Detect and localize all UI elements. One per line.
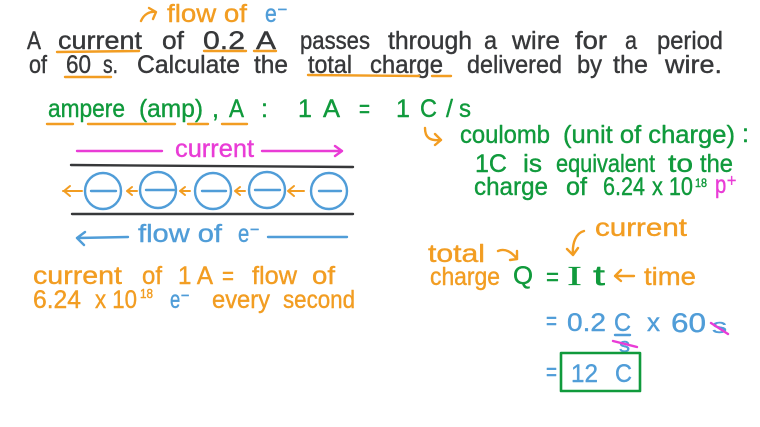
question text: delivered xyxy=(467,51,562,79)
question text: Calculate xyxy=(137,51,240,79)
calculation step: = xyxy=(546,307,557,335)
ampere definition: A xyxy=(229,95,244,123)
result box: 12 xyxy=(571,360,598,388)
question text: total xyxy=(308,51,352,79)
current label with arrow: current xyxy=(175,135,254,163)
coulomb definition: p⁺ xyxy=(715,171,737,199)
question text: the xyxy=(613,51,648,79)
coulomb definition: equivalent xyxy=(556,150,655,178)
formula: Q = I t: I xyxy=(567,261,582,291)
question text: wire. xyxy=(664,51,722,79)
statement: 1 A flow of electrons: x 10 xyxy=(95,286,137,314)
coulomb definition: 6.24 xyxy=(603,173,645,201)
coulomb definition: (unit of charge) xyxy=(563,121,735,149)
ampere definition: 1 xyxy=(396,95,410,123)
question text: s. xyxy=(103,51,118,79)
formula annotations: time xyxy=(644,263,696,291)
ampere definition: / xyxy=(446,95,453,123)
annotation: flow of electrons xyxy=(141,0,288,28)
formula annotations: charge xyxy=(430,263,500,291)
ampere underlines xyxy=(47,123,247,125)
flow of electrons label with arrow xyxy=(77,220,347,248)
statement: 1 A flow of electrons: flow xyxy=(252,262,298,290)
formula annotations xyxy=(428,214,696,291)
question text: A xyxy=(256,27,276,55)
statement: 1 A flow of electrons: 1 A xyxy=(178,262,213,290)
statement: 1 A flow of electrons: e⁻ xyxy=(170,286,190,314)
ampere definition: A xyxy=(323,95,340,123)
question text: of xyxy=(162,27,184,55)
question text: 60 xyxy=(66,51,91,79)
result box: C xyxy=(615,360,632,388)
formula: Q = I t: t xyxy=(593,260,605,291)
coulomb definition: the xyxy=(700,150,733,178)
coulomb definition: charge xyxy=(474,173,548,201)
coulomb definition: of xyxy=(566,173,587,201)
statement: 1 A flow of electrons: 18 xyxy=(140,286,153,301)
coulomb definition: to xyxy=(668,150,693,178)
formula: Q = I t: Q xyxy=(513,262,533,290)
calculation step: s xyxy=(712,316,727,338)
question text: by xyxy=(577,51,602,79)
question text: A xyxy=(27,27,41,55)
ampere definition xyxy=(48,95,471,123)
ampere definition: : xyxy=(261,95,268,123)
question text: a xyxy=(625,27,637,55)
question text: period xyxy=(657,27,723,55)
formula: Q = I t: = xyxy=(546,263,559,291)
icon: hook arrow to coulomb xyxy=(425,128,441,145)
statement: 1 A flow of electrons: of xyxy=(312,262,335,290)
coulomb definition: is xyxy=(523,150,542,178)
coulomb definition: : xyxy=(742,120,749,148)
formula annotations: current xyxy=(595,214,687,242)
question text: for xyxy=(575,27,607,55)
calculation step: 0.2 xyxy=(567,309,606,337)
ampere definition: , xyxy=(212,95,219,123)
statement: 1 A flow of electrons: every xyxy=(212,286,270,314)
question text: 0.2 xyxy=(203,27,245,55)
flow of electrons label with arrow: flow of xyxy=(138,220,222,248)
result box: = xyxy=(546,358,557,386)
statement: 1 A flow of electrons: second xyxy=(283,286,355,314)
wire walls xyxy=(71,165,353,214)
question text: wire xyxy=(511,27,560,55)
wire diagram xyxy=(63,135,353,248)
calculation step xyxy=(546,307,728,357)
question text xyxy=(27,27,723,79)
question text: a xyxy=(484,27,497,55)
ampere definition: C xyxy=(420,95,437,123)
calculation step: s xyxy=(619,335,630,357)
calculation step: x xyxy=(647,309,661,337)
ampere definition: (amp) xyxy=(139,95,203,123)
calculation step: 60 xyxy=(671,308,706,338)
flow of electrons label with arrow: e⁻ xyxy=(238,220,260,248)
question text: the xyxy=(254,51,288,79)
coulomb definition: 18 xyxy=(695,176,707,190)
small electron flow arrows xyxy=(63,186,304,196)
coulomb definition: 1C xyxy=(475,150,507,178)
coulomb definition: x 10 xyxy=(652,173,693,201)
question text: charge xyxy=(370,51,443,79)
coulomb definition: coulomb xyxy=(460,121,550,149)
coulomb definition xyxy=(460,120,749,201)
question underlines xyxy=(57,51,451,77)
statement: 1 A flow of electrons: current xyxy=(33,262,122,290)
formula: Q = I t xyxy=(513,260,605,291)
question text: passes xyxy=(300,27,370,55)
ampere definition: 1 xyxy=(298,95,312,123)
question text: of xyxy=(29,51,47,79)
calculation step: C xyxy=(614,309,631,337)
current label with arrow xyxy=(77,135,342,163)
ampere definition: = xyxy=(359,95,370,123)
electrons xyxy=(85,172,347,209)
formula annotations: total xyxy=(428,240,485,268)
annotation: flow of electrons: flow of xyxy=(167,0,247,28)
statement: 1 A flow of electrons: = xyxy=(222,262,234,290)
statement: 1 A flow of electrons: of xyxy=(142,262,162,290)
ampere definition: s xyxy=(459,95,471,123)
statement: 1 A flow of electrons: 6.24 xyxy=(33,286,81,314)
result box xyxy=(546,353,640,391)
question text: current xyxy=(58,27,142,55)
annotation: flow of electrons: e⁻ xyxy=(265,0,288,28)
question text: through xyxy=(388,27,472,55)
statement: 1 A flow of electrons xyxy=(33,262,355,314)
ampere definition: ampere xyxy=(48,95,125,123)
